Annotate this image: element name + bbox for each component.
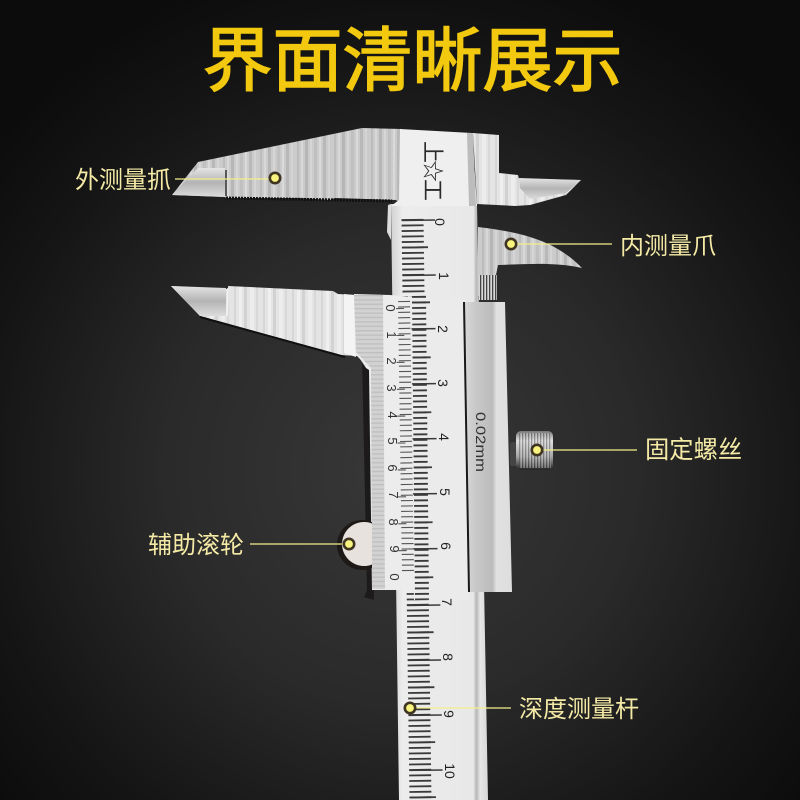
- slider right block: [463, 302, 512, 592]
- callout: inner jaw: 内测量爪: [620, 233, 716, 260]
- main beam: [387, 204, 488, 800]
- vernier digits: 5: [385, 437, 400, 445]
- slider: [171, 286, 512, 600]
- logo: 上☆工: [420, 141, 445, 201]
- lower main digits: 8: [440, 653, 456, 661]
- main scale ticks: [412, 219, 426, 800]
- main scale digits, upper: 0: [432, 218, 448, 226]
- callout: outer jaw: [75, 167, 280, 194]
- vernier digits: 4: [385, 411, 400, 419]
- callout: fixing screw: [532, 437, 742, 464]
- lower main digits: [439, 598, 458, 779]
- main digits in window: [435, 325, 454, 550]
- dark underside of slider: [362, 356, 374, 600]
- vernier digits: 3: [384, 384, 399, 392]
- vernier ticks: [400, 301, 408, 577]
- main digits in window: 3: [435, 379, 451, 387]
- title: 界面清晰展示: [202, 22, 622, 100]
- vernier digits: 8: [386, 518, 401, 526]
- outer measuring jaw, fixed: [172, 128, 402, 205]
- vernier plate: [354, 294, 420, 590]
- lower main digits: 9: [441, 710, 457, 718]
- vernier digits: 7: [386, 491, 401, 499]
- head of beam: [391, 129, 477, 206]
- callout: roller: [148, 532, 354, 559]
- vernier digits: 0: [387, 573, 402, 581]
- fixing screw: [510, 431, 553, 470]
- main digits in window: 6: [438, 542, 454, 550]
- lower outer jaw: [171, 286, 372, 372]
- vernier digits: 2: [384, 357, 399, 365]
- callout: inner jaw: [506, 233, 716, 260]
- callout: depth rod: 深度测量杆: [519, 696, 639, 723]
- main digits in window: 5: [437, 488, 453, 496]
- main digits in window: 4: [436, 433, 452, 441]
- knurled strip: [354, 295, 385, 589]
- lower main digits: 7: [439, 598, 455, 606]
- main scale digits, upper: 1: [436, 272, 452, 280]
- caliper: [171, 128, 582, 800]
- vernier digits: 9: [387, 545, 402, 553]
- upper inside jaw, right: [473, 133, 581, 206]
- precision text: 0.02mm: [473, 412, 489, 472]
- callout: outer jaw: 外测量抓: [75, 167, 171, 194]
- head highlight strip: [467, 133, 476, 206]
- auxiliary roller wheel: [337, 520, 372, 570]
- vernier digits: 6: [385, 464, 400, 472]
- callout: roller: 辅助滚轮: [148, 532, 244, 559]
- vernier digits: [383, 304, 402, 581]
- main digits in window: 2: [435, 325, 451, 333]
- lower main digits: 10: [442, 763, 458, 779]
- callout: depth rod: [405, 696, 639, 723]
- main scale digits, upper: [432, 218, 452, 280]
- callout: fixing screw: 固定螺丝: [645, 437, 742, 464]
- inner measuring jaw: [478, 227, 582, 300]
- vernier digits: 0: [383, 304, 398, 312]
- vernier digits: 1: [384, 331, 399, 339]
- window showing main scale: [408, 296, 469, 600]
